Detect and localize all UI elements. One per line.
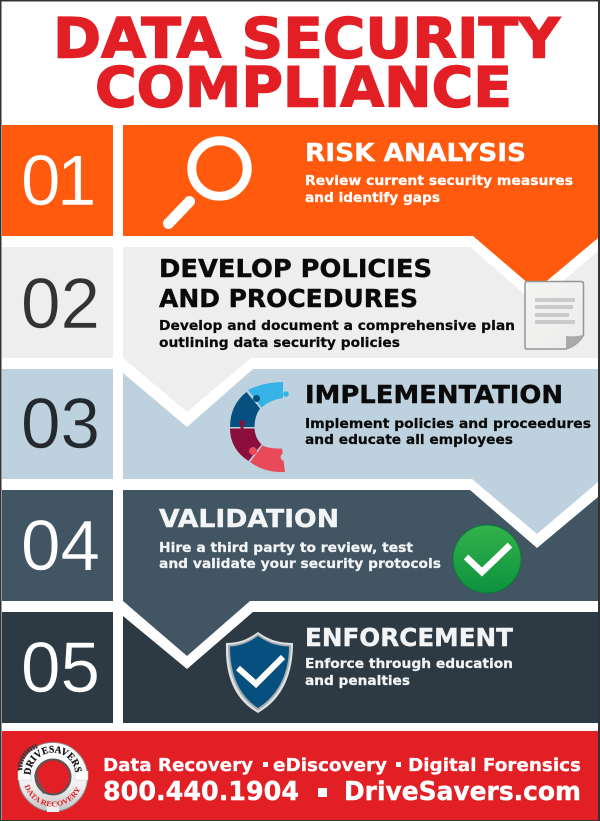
step 2 heading: DEVELOP POLICIES [159,254,432,283]
step 1 number [21,142,96,221]
step 2 description [159,318,515,351]
title: DATA SECURITY [53,6,561,70]
step 1 number: 0 [21,142,60,221]
services line: Data Recovery [103,755,253,776]
step 2 heading: AND PROCEDURES [159,284,418,313]
contact line: DriveSavers.com [344,777,581,807]
step 4 heading: VALIDATION [159,504,339,533]
panel: step 5 enforcement [2,612,598,723]
footer [2,731,598,821]
contact line: 800.440.1904 [103,777,299,807]
step 5 heading: ENFORCEMENT [305,623,513,652]
step 3 number: 03 [21,385,100,464]
step 1 heading: RISK ANALYSIS [305,138,526,167]
panel: step 4 validation [2,490,598,656]
icon: document [525,282,584,349]
services line [103,755,581,776]
logo: life ring: DATA RECOVERY [24,784,80,807]
step 4 description [159,540,441,572]
step 5 description: and penalties [305,673,410,689]
panel: step 3 implementation [2,369,598,534]
icon: magnifying glass [168,141,247,224]
step 1 number: 1 [57,142,96,221]
services line: eDiscovery [273,755,387,776]
logo: life ring [18,742,88,812]
step 2 description: outlining data security policies [159,335,400,351]
step 4 description: and validate your security protocols [159,556,441,572]
contact line [103,777,581,807]
step 2 number: 02 [21,265,100,344]
step 5 description [305,656,513,689]
step 5 number: 05 [21,629,100,708]
step 1 description: Review current security measures [305,173,573,189]
step 1 description [305,173,573,206]
services line: Digital Forensics [408,755,581,776]
step 5 description: Enforce through education [305,656,513,672]
step 2 description: Develop and document a comprehensive plan [159,318,515,334]
step 1 description: and identify gaps [305,190,440,206]
step 3 description: and educate all employees [305,432,513,448]
icon: green check [453,525,521,593]
step 2 heading [159,254,432,313]
title [53,6,561,120]
title: COMPLIANCE [95,56,512,120]
step 3 description: Implement policies and proceedures [305,416,591,432]
icon: shield [226,632,293,713]
panel: step 1 risk analysis [2,125,598,290]
panel: step 2 policies [2,247,598,412]
step 4 description: Hire a third party to review, test [159,540,413,556]
step 4 number: 04 [21,507,100,586]
logo: life ring: DRIVESAVERS [24,746,82,776]
icon: puzzle ring [230,382,289,472]
step 3 description [305,416,591,448]
step 3 heading: IMPLEMENTATION [305,380,563,409]
